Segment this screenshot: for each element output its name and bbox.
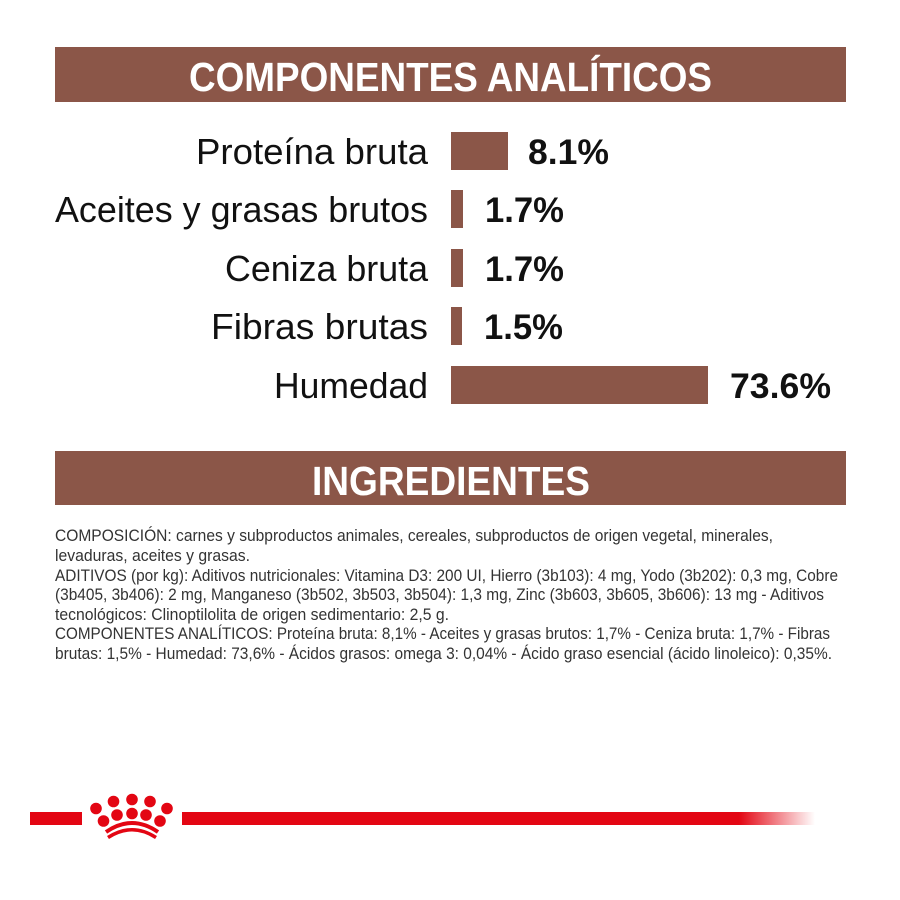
heading: ingredientes xyxy=(55,451,846,505)
row: proteína bruta xyxy=(196,131,609,172)
row: aceites y grasas brutos: Aceites y grasas brutos xyxy=(55,189,428,230)
red line left xyxy=(30,812,82,825)
text block: ingredient details xyxy=(55,526,838,663)
text block: ingredient details: brutas: 1,5% - Humedad: 73,6% - Ácidos grasos: omega 3: 0,04% - Ácido graso esencial (ácido linoleico): 0,35%. xyxy=(55,644,832,663)
row: aceites y grasas brutos: 1.7% xyxy=(485,191,564,230)
heading: componentes analíticos xyxy=(55,47,846,102)
row: proteína bruta: Proteína bruta xyxy=(196,131,429,172)
heading: componentes analíticos: COMPONENTES ANALÍTICOS xyxy=(189,54,712,100)
row: humedad: 73.6% xyxy=(730,367,831,406)
text block: ingredient details: levaduras, aceites y grasas. xyxy=(55,547,250,565)
row: humedad xyxy=(274,365,831,406)
footer brand line with crown logo xyxy=(30,794,815,838)
row: ceniza bruta xyxy=(225,248,564,289)
heading: ingredientes: INGREDIENTES xyxy=(312,458,590,504)
row: proteína bruta: 8.1% xyxy=(528,133,609,172)
row: humedad: Humedad xyxy=(274,365,428,406)
text block: ingredient details: COMPOSICIÓN: carnes y subproductos animales, cereales, subproductos de origen vegetal, minerales, xyxy=(55,526,773,545)
row: fibras brutas: Fibras brutas xyxy=(211,306,428,347)
row: fibras brutas: 1.5% xyxy=(484,308,563,347)
row: ceniza bruta: Ceniza bruta xyxy=(225,248,429,289)
row: ceniza bruta: 1.7% xyxy=(485,250,564,289)
bar chart: analytical components xyxy=(55,131,831,406)
icon: royal crown xyxy=(90,794,173,838)
red line right xyxy=(182,812,815,825)
row: fibras brutas xyxy=(211,306,563,347)
text block: ingredient details: COMPONENTES ANALÍTICOS: Proteína bruta: 8,1% - Aceites y grasas brutos: 1,7% - Ceniza bruta: 1,7% - Fibras xyxy=(55,624,830,643)
text block: ingredient details: tecnológicos: Clinoptilolita de origen sedimentario: 2,5 g. xyxy=(55,606,449,624)
text block: ingredient details: ADITIVOS (por kg): Aditivos nutricionales: Vitamina D3: 200 UI, Hierro (3b103): 4 mg, Yodo (3b202): 0,3 mg, Cobre xyxy=(55,567,838,585)
text block: ingredient details: (3b405, 3b406): 2 mg, Manganeso (3b502, 3b503, 3b504): 1,3 mg, Zinc (3b603, 3b605, 3b606): 13 mg - Aditivos xyxy=(55,586,824,604)
